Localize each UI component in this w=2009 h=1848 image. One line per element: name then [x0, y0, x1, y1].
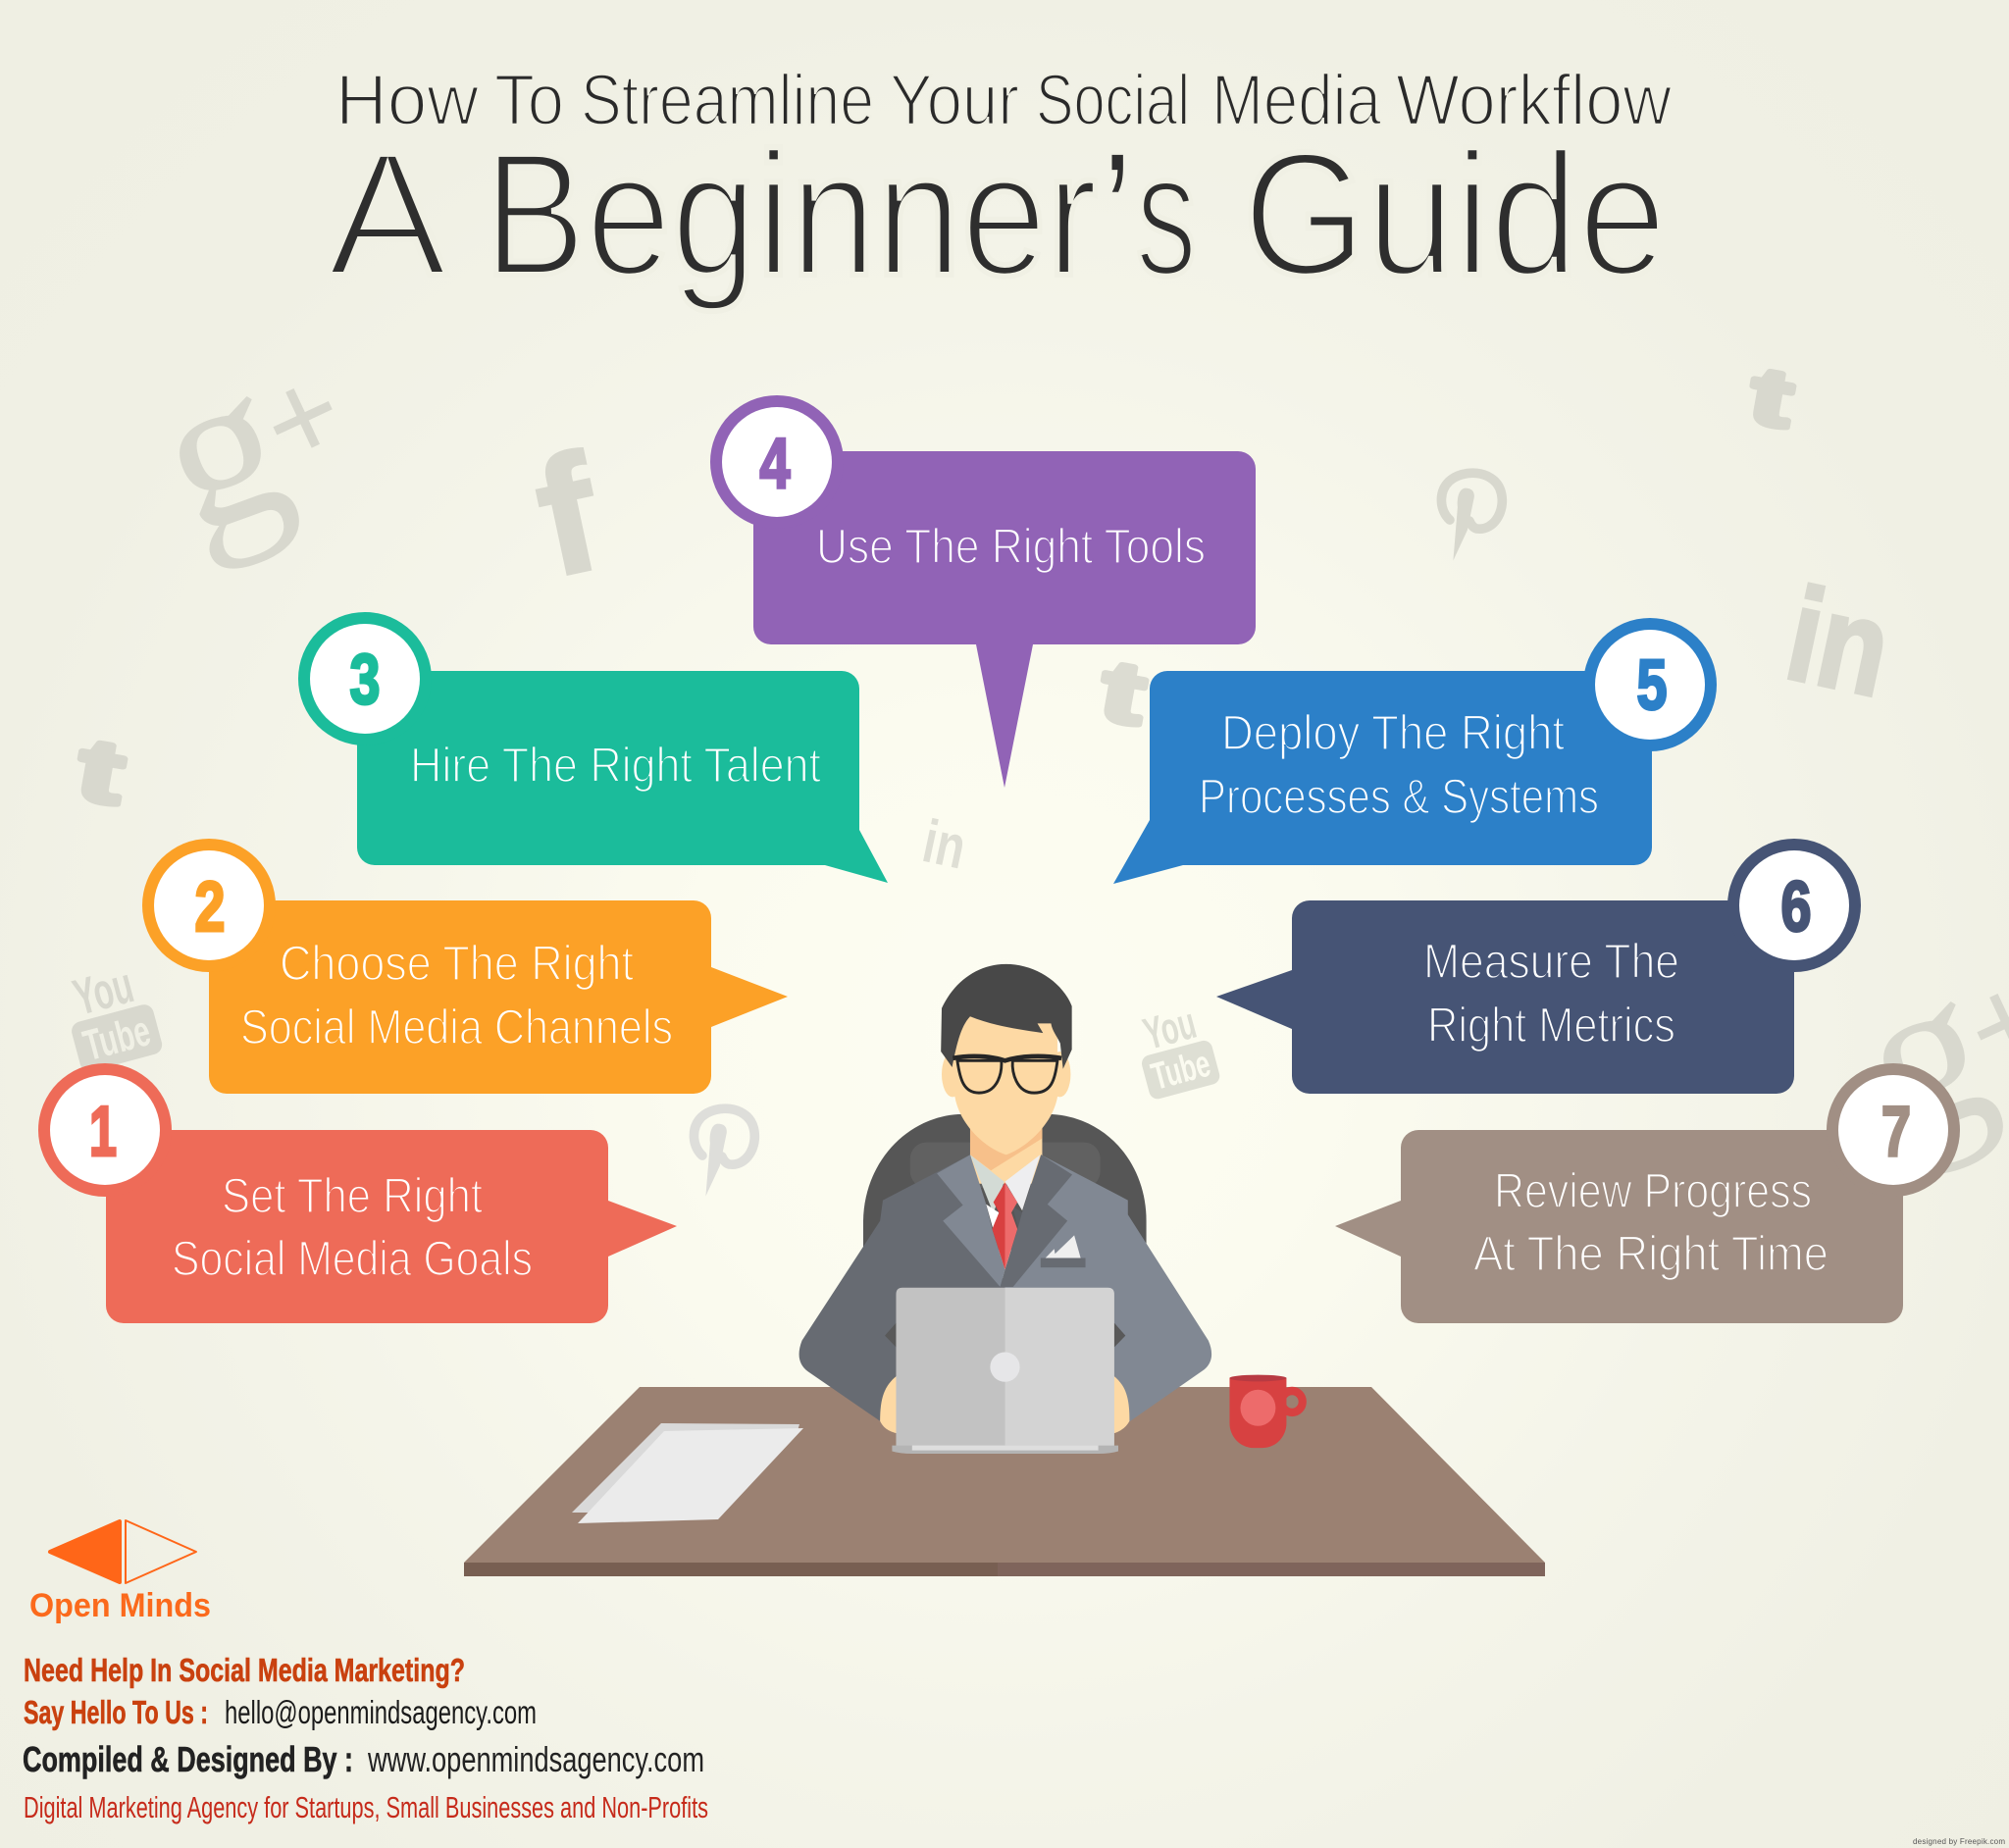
coffee mug — [1229, 1375, 1303, 1448]
hair — [941, 964, 1072, 1069]
number badge 7: 7 — [1881, 1093, 1911, 1171]
logo mark — [50, 1520, 196, 1583]
main heading: Beginner — [484, 116, 1098, 312]
jacket — [799, 1155, 1211, 1433]
step text: Right Metrics — [1427, 998, 1675, 1052]
help heading: Need Help In Social Media Marketing? — [24, 1652, 465, 1688]
subtitle line: How — [335, 61, 479, 140]
number badge 6 — [1727, 839, 1861, 972]
number badge 2 — [142, 839, 276, 972]
step text: Deploy The Right — [1221, 705, 1565, 760]
number badge 4 — [710, 395, 844, 529]
number badge 1: 1 — [89, 1093, 117, 1171]
icon: pinterest center left — [694, 1108, 754, 1196]
arm shadows — [885, 1322, 1125, 1348]
subtitle line: Media — [1211, 61, 1381, 140]
step text: Social Media Channels — [240, 1000, 673, 1054]
number badge 4: 4 — [759, 425, 791, 503]
subtitle line: Workflow — [1396, 61, 1672, 140]
ears — [942, 1052, 1070, 1097]
callout body — [357, 671, 888, 883]
icon: tumblr center: t — [1094, 641, 1153, 744]
desk — [464, 1387, 1545, 1576]
collar — [970, 1155, 1040, 1230]
step text — [240, 936, 673, 1054]
panel: step 5 deploy the right processes and systems — [1113, 618, 1717, 884]
step text: Use The Right Tools — [816, 519, 1206, 574]
panel: step 4 use the right tools — [710, 395, 1256, 788]
number badge 5: 5 — [1636, 646, 1668, 725]
panel: step 6 measure the right metrics — [1216, 839, 1861, 1094]
papers — [572, 1423, 803, 1523]
image credit: designed by Freepik.com — [1913, 1837, 2005, 1846]
step text: Hire The Right Talent — [410, 738, 821, 793]
step text: Processes & Systems — [1199, 769, 1599, 824]
panel: step 1 set the right social media goals — [38, 1063, 677, 1323]
main heading: ’ — [1103, 116, 1132, 312]
agency tagline: Digital Marketing Agency for Startups, Small Businesses and Non-Profits — [24, 1790, 708, 1824]
desk top — [464, 1387, 1545, 1563]
credits line — [23, 1739, 704, 1779]
number badge 7 — [1827, 1063, 1960, 1197]
email line: hello@openmindsagency.com — [225, 1694, 537, 1730]
main heading: A — [328, 116, 448, 312]
laptop — [892, 1288, 1118, 1454]
credits line: www.openmindsagency.com — [367, 1739, 704, 1779]
step text: Social Media Goals — [172, 1231, 533, 1286]
icon: google plus left: + — [239, 338, 365, 496]
icon: youtube center right: Tube — [1147, 1043, 1214, 1099]
head — [941, 964, 1072, 1155]
callout body — [209, 900, 788, 1094]
number badge 6: 6 — [1781, 868, 1811, 947]
panel: step 3 hire the right talent — [298, 612, 888, 883]
step text — [1199, 705, 1599, 824]
callout body — [1216, 900, 1794, 1094]
subtitle line: Social — [1036, 61, 1190, 140]
tie — [992, 1182, 1017, 1269]
icon: youtube left — [56, 953, 164, 1073]
subtitle line — [335, 61, 1672, 140]
subtitle line: To — [494, 61, 564, 140]
background social media watermark icons — [56, 313, 2009, 1196]
subtitle line: Your — [890, 61, 1019, 140]
office chair — [863, 1114, 1147, 1250]
icon: pinterest top right — [1441, 473, 1502, 560]
email line — [24, 1694, 537, 1730]
glasses — [953, 1056, 1061, 1093]
panel: step 7 review progress at the right time — [1335, 1063, 1960, 1323]
number badge 2: 2 — [194, 868, 226, 947]
icon: tumblr top right: t — [1743, 350, 1799, 445]
main heading — [328, 116, 1667, 312]
footer contact information — [23, 1652, 708, 1824]
step text: Set The Right — [222, 1168, 483, 1223]
step text: Choose The Right — [280, 936, 634, 991]
logo wordmark: Open Minds — [29, 1587, 211, 1624]
callout body — [1335, 1130, 1903, 1323]
step text: Review Progress — [1494, 1163, 1812, 1218]
callout body — [106, 1130, 677, 1323]
icon: linkedin right: in — [1776, 559, 1902, 725]
main heading: s — [1136, 116, 1197, 312]
icon: youtube center right — [1128, 995, 1221, 1101]
main heading: Guide — [1243, 116, 1667, 312]
credits line: Compiled & Designed By : — [23, 1739, 353, 1779]
neck — [970, 1113, 1042, 1184]
icon: facebook f: f — [521, 419, 615, 613]
icon: youtube left: You — [68, 956, 139, 1027]
subtitle line: Streamline — [581, 61, 874, 140]
logo: open minds — [29, 1520, 211, 1624]
face — [954, 1014, 1057, 1155]
step text: Measure The — [1423, 934, 1679, 989]
hands — [880, 1375, 1129, 1433]
email line: Say Hello To Us : — [24, 1694, 208, 1730]
icon: tumblr left: t — [70, 720, 131, 824]
desk front edge — [464, 1563, 1545, 1576]
step text — [172, 1168, 533, 1286]
panel: step 2 choose the right social media channels — [142, 839, 788, 1094]
number badge 3: 3 — [349, 641, 381, 719]
number badge 1 — [38, 1063, 172, 1197]
icon: linkedin center: in — [917, 807, 971, 883]
title — [328, 61, 1672, 312]
number badge 3 — [298, 612, 432, 745]
step text — [1473, 1163, 1829, 1281]
callout body — [753, 451, 1256, 788]
step text: At The Right Time — [1473, 1226, 1829, 1281]
pocket square — [1041, 1235, 1086, 1267]
number badge 5 — [1583, 618, 1717, 751]
lapels — [937, 1155, 1072, 1287]
icon: youtube left: Tube — [78, 1006, 155, 1070]
step text — [1423, 934, 1679, 1052]
person at laptop — [799, 964, 1303, 1454]
icon: youtube center right: You — [1138, 998, 1201, 1059]
icon: google plus left: g — [127, 313, 314, 582]
callout body — [1113, 671, 1652, 884]
